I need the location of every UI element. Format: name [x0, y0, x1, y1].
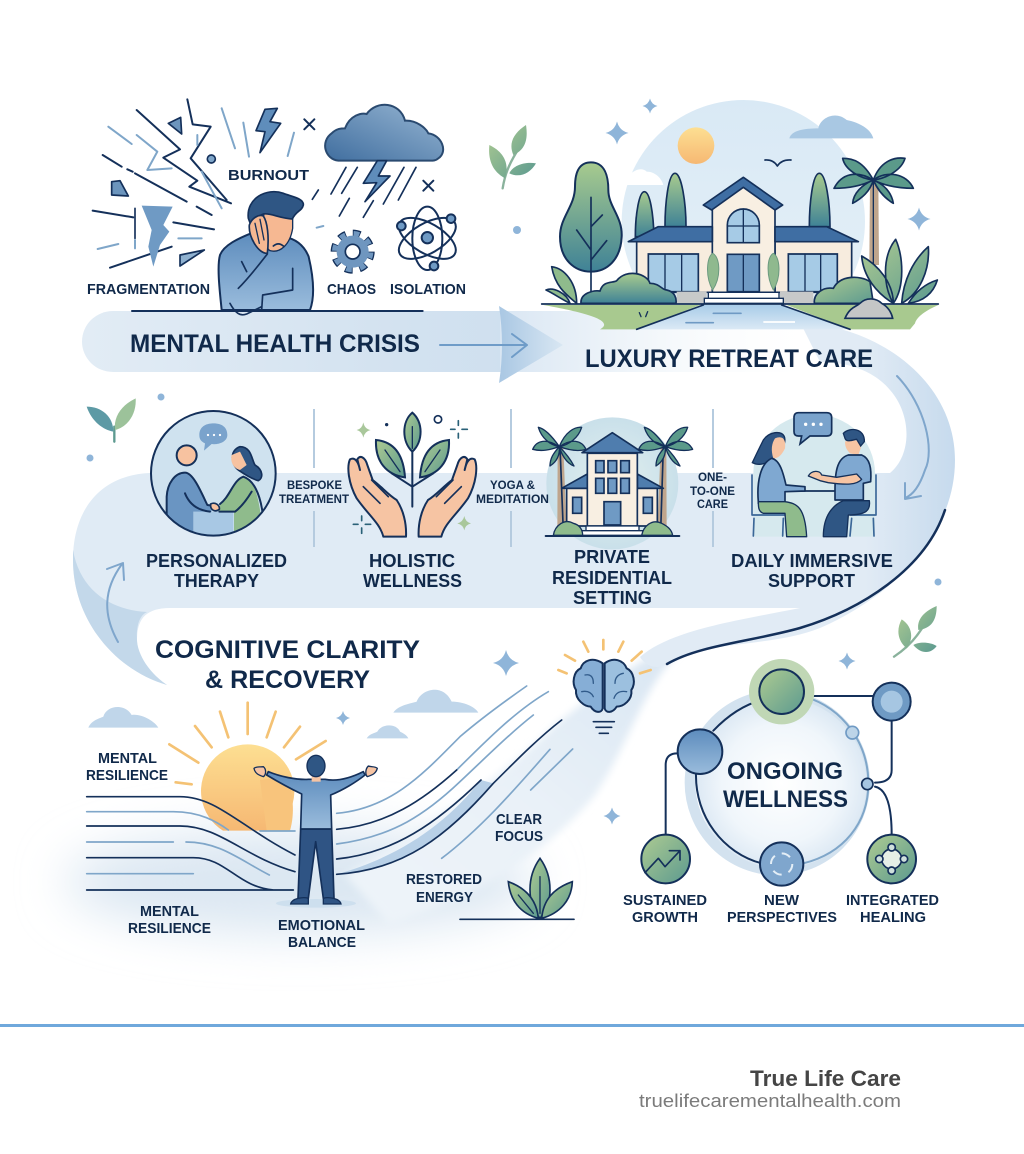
icon: atom [392, 207, 462, 270]
chairs and table [752, 475, 876, 536]
icon: storm cloud [312, 105, 443, 217]
label: burnout: BURNOUT [228, 167, 309, 184]
label: fragmentation: FRAGMENTATION [87, 281, 210, 298]
right curve of ribbon [640, 322, 955, 667]
label: restored energy: RESTORED [406, 871, 482, 888]
label: emotional balance [278, 917, 365, 951]
label: clear focus: CLEAR [496, 811, 542, 828]
sky circle [622, 100, 865, 303]
sparkle stars [86, 98, 942, 824]
icon: gear [335, 234, 371, 270]
label: emotional balance: EMOTIONAL [278, 917, 365, 934]
table line [132, 308, 423, 314]
palm tree [834, 158, 913, 265]
client [808, 430, 871, 537]
scene: sunrise and resilience [87, 686, 574, 919]
heading: cognitive clarity and recovery: COGNITIVE CLARITY [155, 636, 420, 664]
bushes [546, 267, 873, 303]
label: mental resilience lower: RESILIENCE [128, 920, 211, 937]
sprout plant [460, 858, 574, 919]
therapist [752, 433, 807, 537]
leaf right lower [894, 606, 937, 657]
label: private residential setting: PRIVATE [574, 547, 650, 567]
label: new perspectives [727, 892, 837, 926]
scene: luxury retreat [542, 100, 938, 343]
footer brand: True Life Care [750, 1066, 901, 1091]
node: new perspectives [760, 842, 803, 886]
middle ribbon [73, 473, 720, 685]
label: sustained growth [623, 892, 707, 926]
label: clear focus: FOCUS [495, 828, 543, 845]
label: private residential setting: RESIDENTIAL [552, 568, 672, 588]
white cloud [623, 169, 663, 185]
label: isolation: ISOLATION [390, 281, 466, 298]
heading: ongoing wellness: WELLNESS [723, 786, 848, 813]
connectors [666, 696, 892, 835]
background flow ribbon [65, 306, 955, 934]
bird [765, 160, 791, 166]
heading: ongoing wellness: ONGOING [727, 758, 843, 785]
footer rule [0, 1024, 1024, 1027]
label: new perspectives: PERSPECTIVES [727, 909, 837, 926]
label: integrated healing: INTEGRATED [846, 892, 939, 909]
node: green top [749, 659, 814, 724]
heading: cognitive clarity and recovery: & RECOVERY [205, 666, 370, 694]
label: mental resilience lower: MENTAL [140, 903, 199, 920]
node: integrated healing [867, 835, 916, 883]
icon: daily immersive support [752, 413, 876, 537]
ribbon left crescent [73, 550, 167, 685]
dark arc [696, 700, 762, 863]
label: chaos: CHAOS [327, 281, 376, 298]
label: integrated healing [846, 892, 939, 926]
icon: personalized therapy [151, 411, 276, 537]
icon: x marks [304, 119, 433, 191]
label: sustained growth: GROWTH [632, 909, 698, 926]
clouds [88, 690, 478, 738]
palms [533, 427, 693, 532]
node: sustained growth [641, 835, 690, 883]
label: restored energy: ENERGY [416, 889, 473, 906]
node: small junction [862, 778, 873, 790]
icon: distressed person [219, 192, 313, 315]
rock [845, 299, 893, 318]
shattered lines [93, 99, 323, 268]
decorative leaves [87, 125, 937, 657]
trees [560, 162, 830, 295]
node: blue left [678, 729, 722, 774]
label: daily immersive support: DAILY IMMERSIVE [731, 551, 893, 571]
label: clear focus [495, 811, 543, 845]
lower pale blob [65, 830, 535, 934]
label: emotional balance: BALANCE [288, 934, 356, 951]
label: restored energy [406, 871, 482, 906]
thin arrow on left curve [107, 563, 124, 642]
flow lines left [87, 797, 295, 890]
ribbon right bottom stroke [667, 510, 945, 664]
label: one-to-one care [690, 470, 735, 511]
icon: brain with light bulb [558, 640, 651, 733]
leaf top centre [489, 125, 536, 188]
label: yoga and meditation: MEDITATION [476, 492, 549, 506]
label: holistic wellness: WELLNESS [363, 571, 462, 591]
sun rays [169, 703, 326, 784]
leaf left middle [87, 398, 136, 442]
thin arrow on ribbon [440, 334, 527, 357]
figure with open arms [254, 755, 377, 908]
label: one-to-one care: CARE [697, 497, 728, 511]
heading: luxury retreat care: LUXURY RETREAT CARE [585, 345, 873, 373]
outer halo [690, 695, 865, 870]
label: mental resilience upper: MENTAL [98, 750, 157, 767]
label: private residential setting: SETTING [573, 588, 652, 608]
icon: bolt [256, 108, 281, 153]
label: mental resilience lower [128, 903, 211, 937]
thin arrow on right curve [897, 376, 929, 499]
label: mental resilience upper: RESILIENCE [86, 767, 168, 784]
icon: holistic wellness [348, 413, 476, 537]
label: bespoke treatment: BESPOKE [287, 478, 342, 492]
scene: mental health crisis [93, 99, 462, 315]
label: personalized therapy: THERAPY [174, 571, 259, 591]
arrow head [499, 306, 563, 383]
node: green top core [759, 669, 804, 714]
label: personalized therapy: PERSONALIZED [146, 551, 287, 571]
node: blue top right [873, 683, 911, 721]
label: holistic wellness: HOLISTIC [369, 551, 455, 571]
label: integrated healing: HEALING [860, 909, 926, 926]
label: private residential setting [552, 547, 672, 608]
label: bespoke treatment [279, 478, 350, 506]
heading: ongoing wellness [723, 758, 848, 813]
speech bubble [794, 413, 832, 444]
label: one-to-one care: ONE- [698, 470, 727, 484]
big leaf plant [862, 239, 937, 303]
ribbon fade after arrow [500, 311, 820, 372]
label: new perspectives: NEW [764, 892, 800, 909]
label: one-to-one care: TO-ONE [690, 484, 735, 498]
top ribbon [82, 311, 505, 372]
heading: mental health crisis: MENTAL HEALTH CRISIS [130, 330, 420, 358]
heading: cognitive clarity and recovery [155, 636, 420, 694]
lower swoosh [345, 640, 690, 925]
footer url: truelifecarementalhealth.com [639, 1090, 901, 1111]
label: bespoke treatment: TREATMENT [279, 492, 350, 506]
label: yoga and meditation [476, 478, 549, 506]
sun [201, 744, 294, 831]
label: yoga and meditation: YOGA & [490, 478, 535, 492]
label: daily immersive support [731, 551, 893, 591]
label: daily immersive support: SUPPORT [768, 571, 855, 591]
label: sustained growth: SUSTAINED [623, 892, 707, 909]
label: holistic wellness [363, 551, 462, 591]
blue arc [803, 697, 868, 863]
inner disc [697, 698, 867, 868]
node: small [846, 726, 859, 739]
separators [314, 409, 713, 547]
label: personalized therapy [146, 551, 287, 591]
icon: private residential setting [533, 417, 693, 549]
lawn and driveway [542, 304, 938, 329]
diagram: ongoing wellness [641, 659, 916, 886]
flow lines right [337, 686, 573, 874]
villa [628, 177, 858, 303]
label: mental resilience upper [86, 750, 168, 784]
sun [678, 127, 714, 164]
cloud top right [789, 115, 873, 138]
